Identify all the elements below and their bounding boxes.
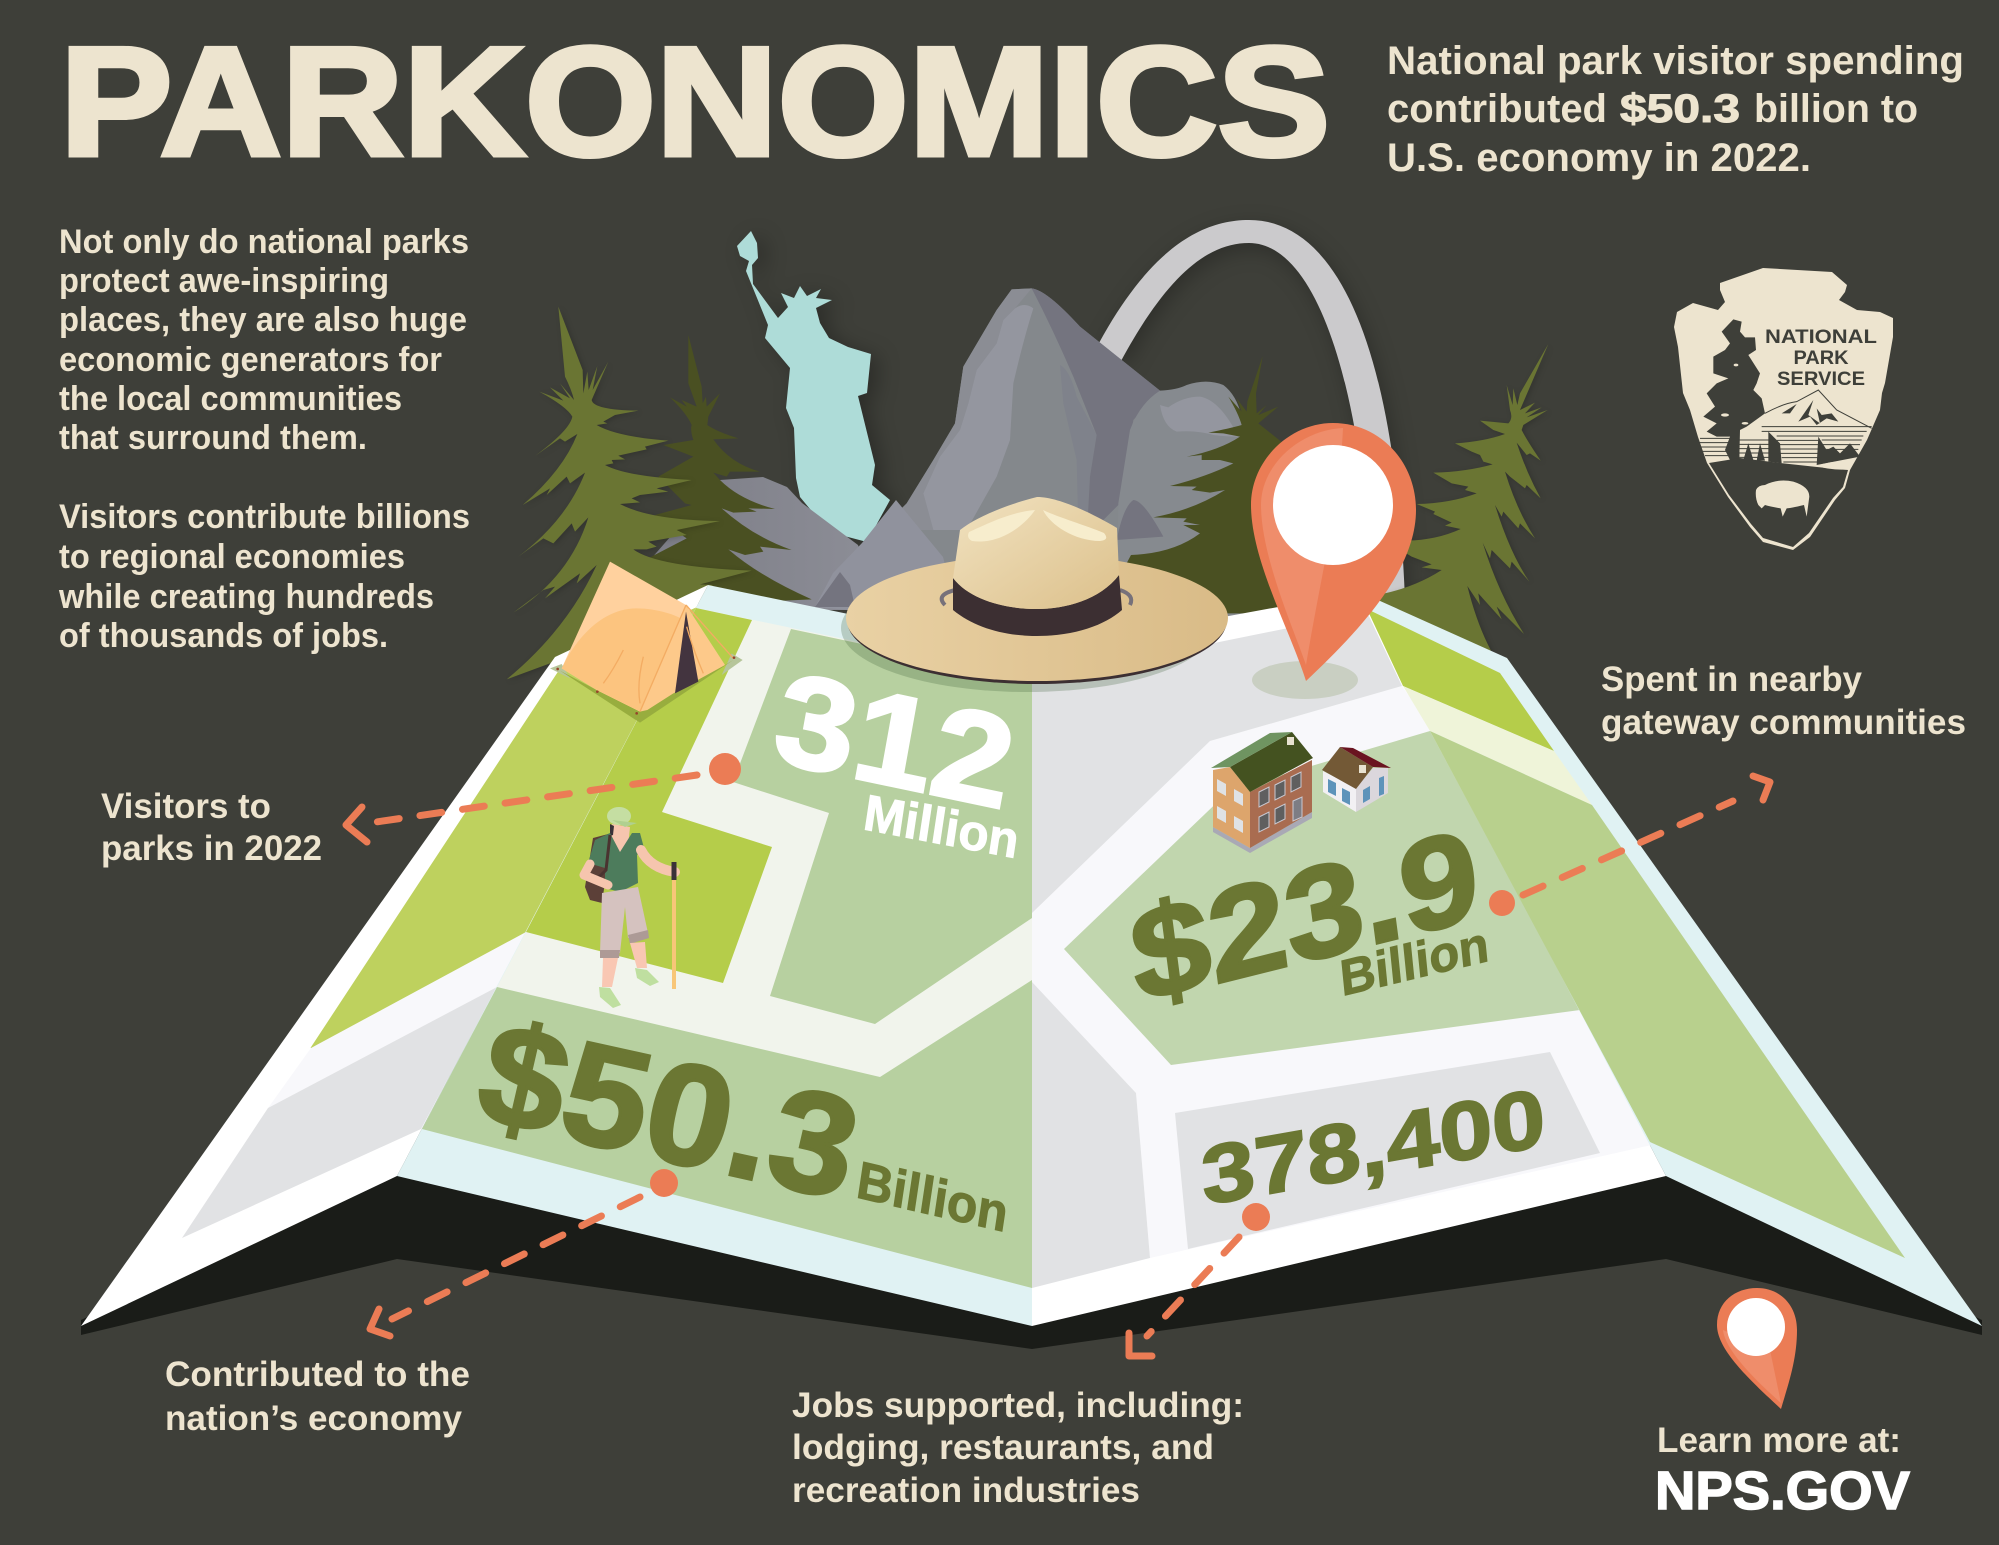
right outer panel <box>1360 592 1982 1326</box>
label: gateway spending: Spent in nearby <box>1601 660 1863 699</box>
icon: NPS arrowhead logo: PARK <box>1794 347 1848 369</box>
label: jobs: recreation industries <box>792 1471 1140 1510</box>
icon: statue of liberty <box>737 231 890 542</box>
body text: economic generators for <box>59 341 442 379</box>
icon: tree center right <box>1100 356 1283 613</box>
icon: NPS arrowhead logo: NATIONAL <box>1765 326 1877 348</box>
label: jobs <box>792 1386 1244 1510</box>
icon: mountains <box>640 288 1283 620</box>
centre right panel <box>1032 592 1666 1326</box>
stat: $50.3 billion: Billion <box>853 1151 1012 1244</box>
call to action: NPS.GOV <box>1655 1461 1910 1521</box>
label: visitors: parks in 2022 <box>101 829 322 868</box>
stat: 378,400 jobs: 378,400 <box>1198 1071 1548 1223</box>
label: gateway spending <box>1601 660 1966 742</box>
intro statement: National park visitor spending <box>1387 39 1964 83</box>
label: visitors <box>101 787 322 868</box>
body text: Not only do national parks <box>59 223 469 261</box>
title: PARKONOMICS <box>60 15 1330 188</box>
body text <box>58 223 470 655</box>
label: economy contribution: Contributed to the <box>165 1355 470 1394</box>
call to action: Learn more at: <box>1657 1421 1901 1460</box>
panel: folded map <box>81 585 1982 1349</box>
icon: NPS arrowhead logo <box>1674 268 1893 550</box>
label: visitors: Visitors to <box>101 787 271 826</box>
call to action <box>1655 1421 1910 1521</box>
icon: houses <box>1211 732 1391 853</box>
icon: tree front left <box>507 307 752 679</box>
stat: $50.3 billion: $50.3 <box>465 992 873 1230</box>
stat: $23.9 billion: Billion <box>1337 915 1491 1007</box>
intro statement: $50.3 <box>1620 87 1740 131</box>
intro statement: billion to <box>1754 87 1918 131</box>
stat: 312 million: Million <box>860 784 1023 869</box>
centre left panel <box>397 585 1032 1326</box>
intro statement: U.S. economy in 2022. <box>1387 136 1811 180</box>
icon: ranger hat <box>841 497 1228 692</box>
arrow: jobs <box>1129 1203 1270 1356</box>
arrow: visitors <box>346 753 741 842</box>
intro statement <box>1387 39 1964 180</box>
label: economy contribution: nation’s economy <box>165 1399 463 1438</box>
arrow: economy contribution <box>370 1169 678 1336</box>
body text: protect awe-inspiring <box>59 262 389 300</box>
icon: NPS arrowhead logo: SERVICE <box>1777 368 1865 390</box>
intro statement: contributed <box>1387 87 1607 131</box>
stat: 312 million: 312 <box>765 644 1025 837</box>
label: gateway spending: gateway communities <box>1601 703 1966 742</box>
icon: hiker <box>584 807 675 1008</box>
label: economy contribution <box>165 1355 470 1438</box>
stat: $50.3 billion <box>465 992 1012 1244</box>
body text: that surround them. <box>59 419 367 457</box>
arrow: gateway spending <box>1489 776 1770 916</box>
icon: tent <box>550 562 743 723</box>
body text: while creating hundreds <box>58 578 434 616</box>
body text: places, they are also huge <box>59 301 467 339</box>
map shadow <box>81 1170 1982 1349</box>
body text: of thousands of jobs. <box>59 617 388 655</box>
left outer panel <box>81 585 708 1326</box>
icon: large map pin <box>1251 423 1416 681</box>
body text: to regional economies <box>59 538 405 576</box>
icon: small map pin <box>1717 1288 1797 1409</box>
icon: tree right <box>1367 344 1548 667</box>
label: jobs: Jobs supported, including: <box>792 1386 1244 1425</box>
stat: $23.9 billion: $23.9 <box>1123 801 1487 1030</box>
icon: gateway arch <box>1099 220 1405 600</box>
icon: tree back left <box>650 335 812 605</box>
body text: the local communities <box>59 380 402 418</box>
icon: map pin shadow <box>1252 661 1358 699</box>
label: jobs: lodging, restaurants, and <box>792 1428 1214 1467</box>
body text: Visitors contribute billions <box>59 498 470 536</box>
